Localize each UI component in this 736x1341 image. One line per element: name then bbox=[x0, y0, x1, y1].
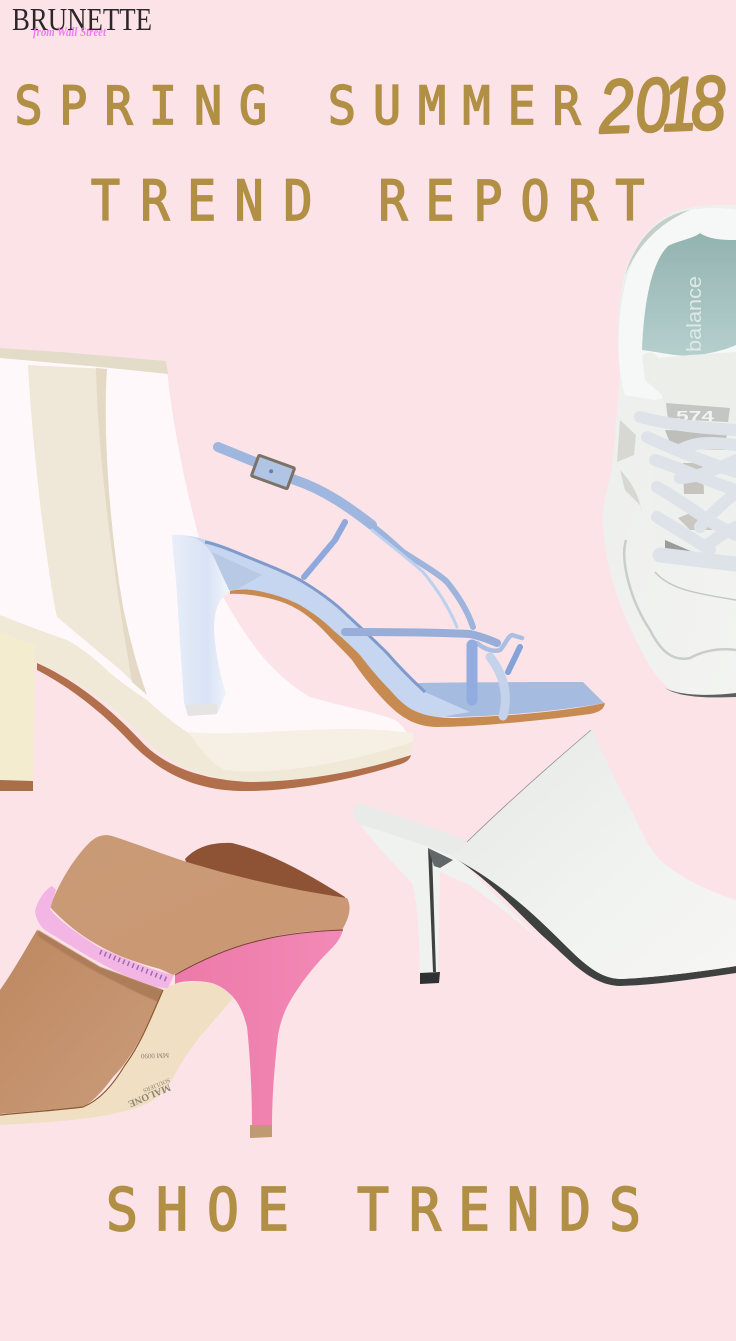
sneaker white collar bbox=[619, 208, 736, 400]
mule sole inner edge bbox=[0, 990, 163, 1115]
title line: SPRING SUMMER: SPRINGSUMMER bbox=[14, 75, 581, 137]
shoe: tan and pink Malone Souliers mule bbox=[0, 835, 350, 1138]
sneaker vamp seam bbox=[655, 572, 736, 600]
mule heel inner line bbox=[428, 848, 436, 972]
sandal buckle bbox=[251, 455, 295, 489]
mule interior bbox=[185, 843, 345, 905]
mule heel top edge bbox=[175, 930, 343, 975]
sandal crossing strap bbox=[345, 632, 497, 643]
sneaker tongue label bbox=[666, 403, 730, 425]
sneaker outer body bbox=[603, 205, 736, 696]
sneaker teal insole bbox=[642, 233, 736, 356]
mule sole bbox=[0, 982, 233, 1125]
sneaker toe seam bbox=[624, 540, 736, 659]
shoe: white pointed mule bbox=[353, 729, 736, 986]
mule upper bbox=[452, 729, 736, 979]
sneaker dark outsole edge bbox=[665, 688, 736, 697]
sneaker lace-bed shadow patches bbox=[665, 430, 727, 555]
footer heading: SHOE TRENDS: SHOETRENDS bbox=[106, 1176, 641, 1245]
sandal inner vertical strap bbox=[304, 522, 345, 577]
sandal toe post right bbox=[490, 657, 505, 716]
sandal straps bbox=[218, 447, 522, 716]
sandal insole side bbox=[172, 535, 470, 717]
sandal leather sole bbox=[230, 590, 605, 727]
mule heel bbox=[357, 820, 540, 973]
sneaker tongue bbox=[642, 352, 736, 430]
title: 2018: 2018 bbox=[597, 60, 727, 149]
mule heel tip bbox=[420, 972, 440, 984]
boot leather sole bbox=[37, 663, 411, 791]
sneaker side panel bbox=[617, 420, 642, 515]
shoe: transparent PVC ankle boot bbox=[0, 348, 413, 791]
boot top rim bbox=[0, 348, 168, 374]
mule sole print bbox=[126, 1051, 172, 1109]
logo: Brunette from Wall Street: BRUNETTE bbox=[12, 1, 152, 37]
sneaker lacing area bbox=[653, 425, 736, 570]
mule sole print: MM 0090 bbox=[140, 1051, 169, 1060]
title line: TREND REPORT: TRENDREPORT bbox=[91, 170, 645, 234]
mule top stitch bbox=[467, 730, 591, 842]
boot cream welt bbox=[0, 615, 413, 782]
mule heel tip bbox=[250, 1125, 272, 1138]
boot block heel bbox=[0, 632, 35, 781]
mule sole print: SOULIERS bbox=[142, 1076, 171, 1093]
mule heel shadow wedge bbox=[428, 848, 453, 868]
boot heel base bbox=[0, 780, 33, 791]
mule pink heel bbox=[175, 930, 343, 1125]
boot toe shading bbox=[187, 729, 413, 775]
mule shadow under strap bbox=[38, 930, 163, 1002]
sneaker insole brand text: balance bbox=[684, 276, 706, 352]
sneaker collar outer shade bbox=[625, 210, 690, 275]
boot beige inner panel bbox=[28, 365, 147, 695]
boot shaft and vamp bbox=[0, 355, 411, 782]
sandal toe post left bbox=[466, 645, 478, 700]
mule pink strap bbox=[35, 886, 174, 988]
shoe: silver New Balance 574 sneaker bbox=[603, 205, 736, 697]
sandal heel cap bbox=[186, 704, 217, 716]
sandal heel-seat shading bbox=[212, 552, 262, 590]
sandal heel bbox=[172, 535, 230, 716]
mule quarter above strap bbox=[50, 835, 350, 975]
sandal ankle strap bbox=[218, 447, 372, 525]
mule black sole line bbox=[452, 856, 736, 986]
mule back strap bbox=[353, 804, 467, 856]
sandal insole upper edge bbox=[205, 542, 425, 692]
sneaker tongue label: 574 bbox=[676, 408, 715, 425]
logo: Brunette from Wall Street: from Wall Street bbox=[33, 24, 106, 39]
sneaker laces bbox=[640, 417, 736, 564]
shoe: metallic blue strappy sandal bbox=[172, 447, 605, 727]
mule sole print: MALONE bbox=[126, 1081, 172, 1109]
sandal toe loop bbox=[477, 635, 522, 651]
mule vamp below strap bbox=[0, 930, 163, 1114]
sandal footbed bbox=[400, 682, 604, 717]
